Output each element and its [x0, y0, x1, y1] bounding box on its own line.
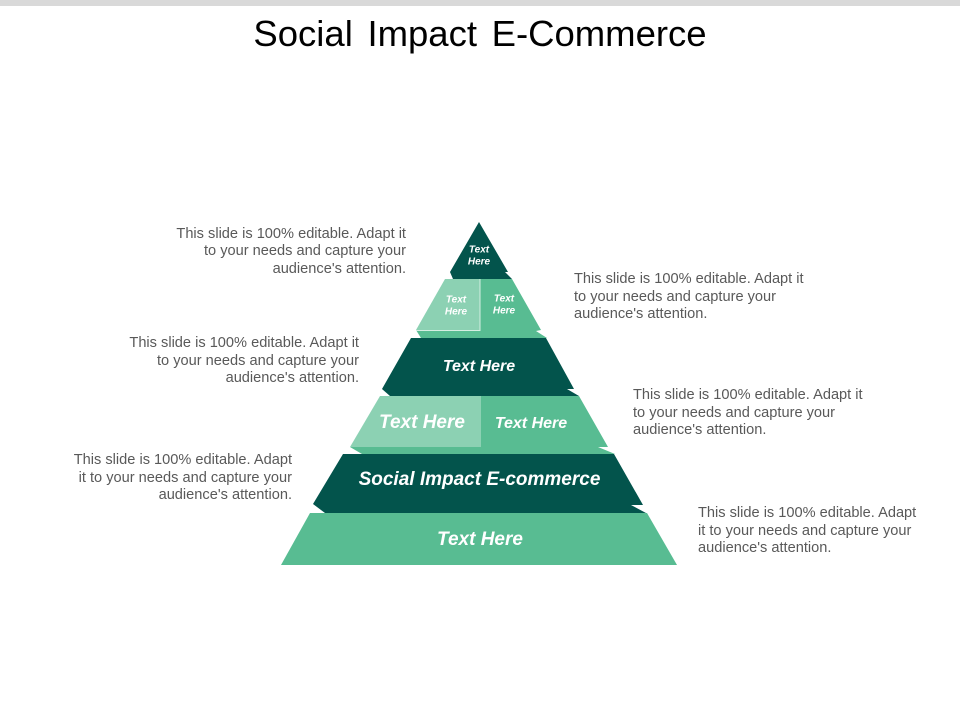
note: lower left: it to your needs and capture your	[79, 470, 292, 486]
tier 2: split band: Here	[445, 306, 468, 318]
note: top left: to your needs and capture your	[204, 243, 406, 259]
note: middle left: audience's attention.	[226, 370, 359, 386]
note: lower right: it to your needs and capture your	[698, 522, 911, 538]
note: top left: audience's attention.	[273, 260, 406, 276]
note: middle right: audience's attention.	[633, 422, 766, 438]
note: lower right: audience's attention.	[698, 540, 831, 556]
note: middle right	[633, 387, 863, 438]
tier 2: split band: Text	[446, 294, 467, 306]
tier 4: split band	[350, 396, 615, 454]
note: upper right: audience's attention.	[574, 306, 707, 322]
note: middle left: This slide is 100% editable. Adapt it	[129, 335, 359, 351]
tier 4: split band: Text Here	[379, 412, 465, 433]
tier 1: apex: Here	[468, 256, 491, 268]
tier 5: dark band	[313, 454, 646, 513]
note: lower left: audience's attention.	[159, 487, 292, 503]
tier 1: apex: Text	[469, 244, 490, 256]
note: middle left	[129, 335, 359, 386]
note: top left: This slide is 100% editable. Adapt it	[176, 226, 406, 242]
tier 3: dark band	[382, 338, 579, 396]
tier 6: base band	[281, 513, 677, 565]
note: upper right: This slide is 100% editable. Adapt it	[574, 271, 804, 287]
tier 3: dark band: Text Here	[443, 358, 515, 375]
note: middle right: to your needs and capture your	[633, 404, 835, 420]
title: Social Impact E-Commerce	[253, 13, 707, 54]
note: upper right: to your needs and capture your	[574, 288, 776, 304]
tier 2: split band: Text	[494, 294, 515, 304]
note: top left	[176, 226, 406, 276]
tier 2: split band: Here	[493, 306, 516, 316]
note: upper right	[574, 271, 804, 322]
note: lower right	[698, 505, 916, 556]
note: lower left	[74, 452, 292, 503]
tier 2: split band	[416, 279, 547, 338]
note: middle right: This slide is 100% editable. Adapt it	[633, 387, 863, 403]
note: lower left: This slide is 100% editable. Adapt	[74, 452, 292, 468]
note: middle left: to your needs and capture your	[157, 352, 359, 368]
tier 5: dark band: Social Impact E-commerce	[359, 469, 601, 490]
tier 6: base band: Text Here	[437, 529, 523, 550]
tier 1: apex	[450, 222, 512, 279]
tier 4: split band: Text Here	[495, 415, 567, 432]
note: lower right: This slide is 100% editable. Adapt	[698, 505, 916, 521]
